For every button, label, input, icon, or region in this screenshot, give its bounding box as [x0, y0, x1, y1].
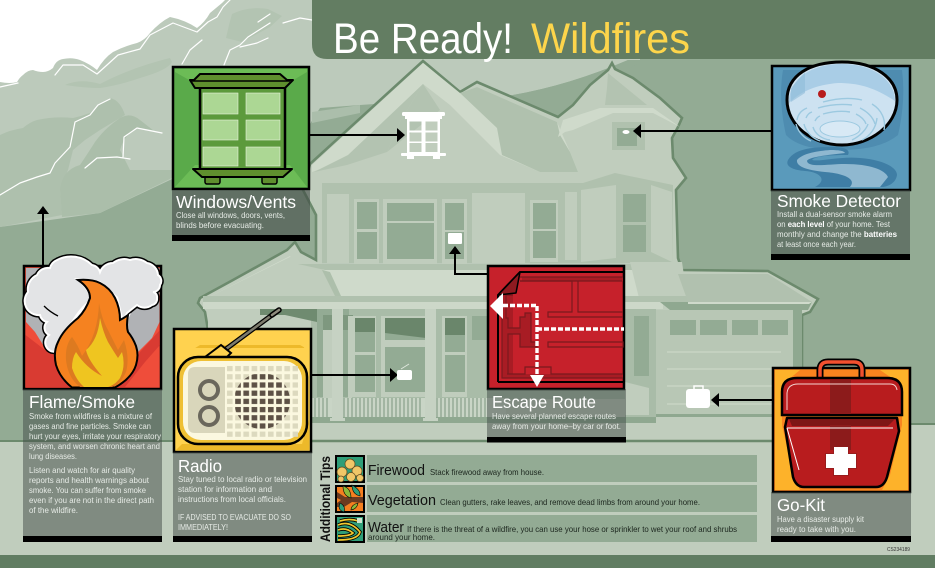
body text: Install a dual-sensor smoke alarm: [777, 209, 892, 219]
title accent text: Wildfires: [531, 16, 690, 63]
water label: Water: [368, 520, 404, 536]
water text continued: around your home.: [368, 532, 435, 542]
flame illustration: [24, 256, 161, 389]
window illustration: [173, 67, 309, 189]
house illustration: [198, 61, 818, 441]
porch railing: [311, 398, 506, 417]
panel: radio: [173, 310, 312, 542]
caption panel: [487, 389, 626, 437]
arrow: go-kit: [711, 393, 772, 407]
house silhouette: [198, 61, 818, 441]
title text: Be Ready!: [333, 16, 513, 63]
porch roof: [203, 256, 688, 302]
heading: Smoke Detector: [777, 191, 901, 211]
title banner: [312, 0, 935, 63]
panel: radio: station for information and: [178, 484, 272, 494]
go-kit illustration: [773, 362, 910, 492]
panel: smoke detector: monthly and change the batteries: [777, 229, 897, 239]
panel: flame/smoke: system, and worsen chronic heart and: [29, 441, 160, 451]
icon: small white escape map: [448, 233, 462, 244]
heading: Windows/Vents: [176, 192, 296, 212]
tips heading: Additional Tips: [317, 456, 333, 542]
body text: Have several planned escape routes: [492, 411, 616, 421]
heading: Escape Route: [492, 392, 596, 412]
main gable band: [312, 63, 578, 172]
dome: [605, 73, 647, 105]
dome window: [612, 122, 645, 150]
escape path dashes: [503, 306, 624, 376]
panel: flame/smoke: Listen and watch for air quality: [29, 465, 136, 475]
firewood label: Firewood: [368, 463, 425, 479]
tip row: water: [336, 515, 757, 542]
porch columns: [332, 309, 343, 419]
porch windows: [352, 316, 376, 397]
panel: flame/smoke: hurt your eyes, irritate your respiratory: [29, 431, 162, 441]
panel: go-kit: [771, 362, 911, 542]
body text: Close all windows, doors, vents,: [176, 210, 285, 220]
caption panel: [771, 190, 910, 254]
gable inner shade: [314, 84, 423, 172]
porch wall: [208, 309, 656, 399]
firewood text: Stack firewood away from house.: [430, 467, 544, 477]
panel: additional tips: [317, 455, 757, 542]
publication code: CS234189: [887, 547, 910, 553]
arrow: radio: [311, 368, 398, 382]
panel: windows/vents: blinds before evacuating.: [176, 220, 264, 230]
panel: flame/smoke: lung diseases.: [29, 451, 77, 461]
body text: Have a disaster supply kit: [777, 514, 865, 524]
arrow: escape route: [449, 246, 487, 274]
arrow: windows: [310, 128, 405, 142]
caption panel: [23, 389, 162, 536]
right porch side: [625, 315, 656, 417]
water text: If there is the threat of a wildfire, you can use your hose or sprinkler to wet your roof and shrubs: [407, 524, 737, 534]
tip row: firewood: [336, 455, 757, 482]
panel: radio: IF ADVISED TO EVACUATE DO SO: [178, 512, 291, 522]
arrow: smoke detector: [633, 124, 771, 138]
escape route map: [488, 266, 624, 389]
panel: flame/smoke: even if you are not in the direct path: [29, 495, 154, 505]
vegetation text: Clean gutters, rake leaves, and remove dead limbs from around your home.: [440, 497, 700, 507]
heading: Flame/Smoke: [29, 392, 135, 412]
body text: Smoke from wildfires is a mixture of: [29, 411, 153, 421]
panel: flame/smoke: of the wildfire.: [29, 505, 78, 515]
panel: smoke detector: at least once each year.: [777, 239, 856, 249]
side roof: [460, 87, 578, 172]
panel: escape route: away from your home–by car or foot.: [492, 421, 621, 431]
panel: flame/smoke: gases and fine particles. Smoke can: [29, 421, 151, 431]
caption panel: [173, 452, 312, 536]
caption panel: [172, 190, 310, 235]
icon: small white kit: [686, 386, 710, 408]
panel: flame/smoke: smoke. You can suffer from smoke: [29, 485, 146, 495]
panel: radio: IMMEDIATELY!: [178, 522, 228, 532]
smoke detector illustration: [772, 62, 910, 190]
arrow: flame to sky: [37, 206, 49, 266]
panel: smoke detector: on each level of your home. Test: [777, 219, 891, 229]
garage door: [656, 310, 793, 415]
panel: flame/smoke: [23, 256, 162, 542]
panel: smoke detector: [771, 62, 910, 260]
ground: [0, 423, 935, 555]
icon: small white radio: [397, 364, 412, 380]
icon: vegetation: [336, 485, 364, 512]
panel: go-kit: ready to take with you.: [777, 524, 856, 534]
panel: escape route: [487, 266, 626, 442]
heading: Go-Kit: [777, 495, 825, 515]
icon: small white window: [401, 112, 446, 159]
caption panel: [771, 492, 911, 536]
radio illustration: [174, 310, 311, 452]
icon: firewood: [336, 456, 364, 482]
second floor: [322, 173, 673, 268]
heading: Radio: [178, 456, 222, 476]
vegetation label: Vegetation: [368, 493, 436, 509]
panel: windows/vents: [172, 67, 310, 241]
icon: water hose: [336, 516, 364, 542]
garage roof: [678, 274, 812, 302]
bottom bar: [0, 555, 935, 568]
icon: small white smoke detector: [622, 130, 630, 134]
tip row: vegetation: [336, 485, 757, 512]
body text: Stay tuned to local radio or television: [178, 474, 307, 484]
panel: radio: instructions from local officials.: [178, 494, 286, 504]
panel: flame/smoke: reports and health warnings about: [29, 475, 150, 485]
